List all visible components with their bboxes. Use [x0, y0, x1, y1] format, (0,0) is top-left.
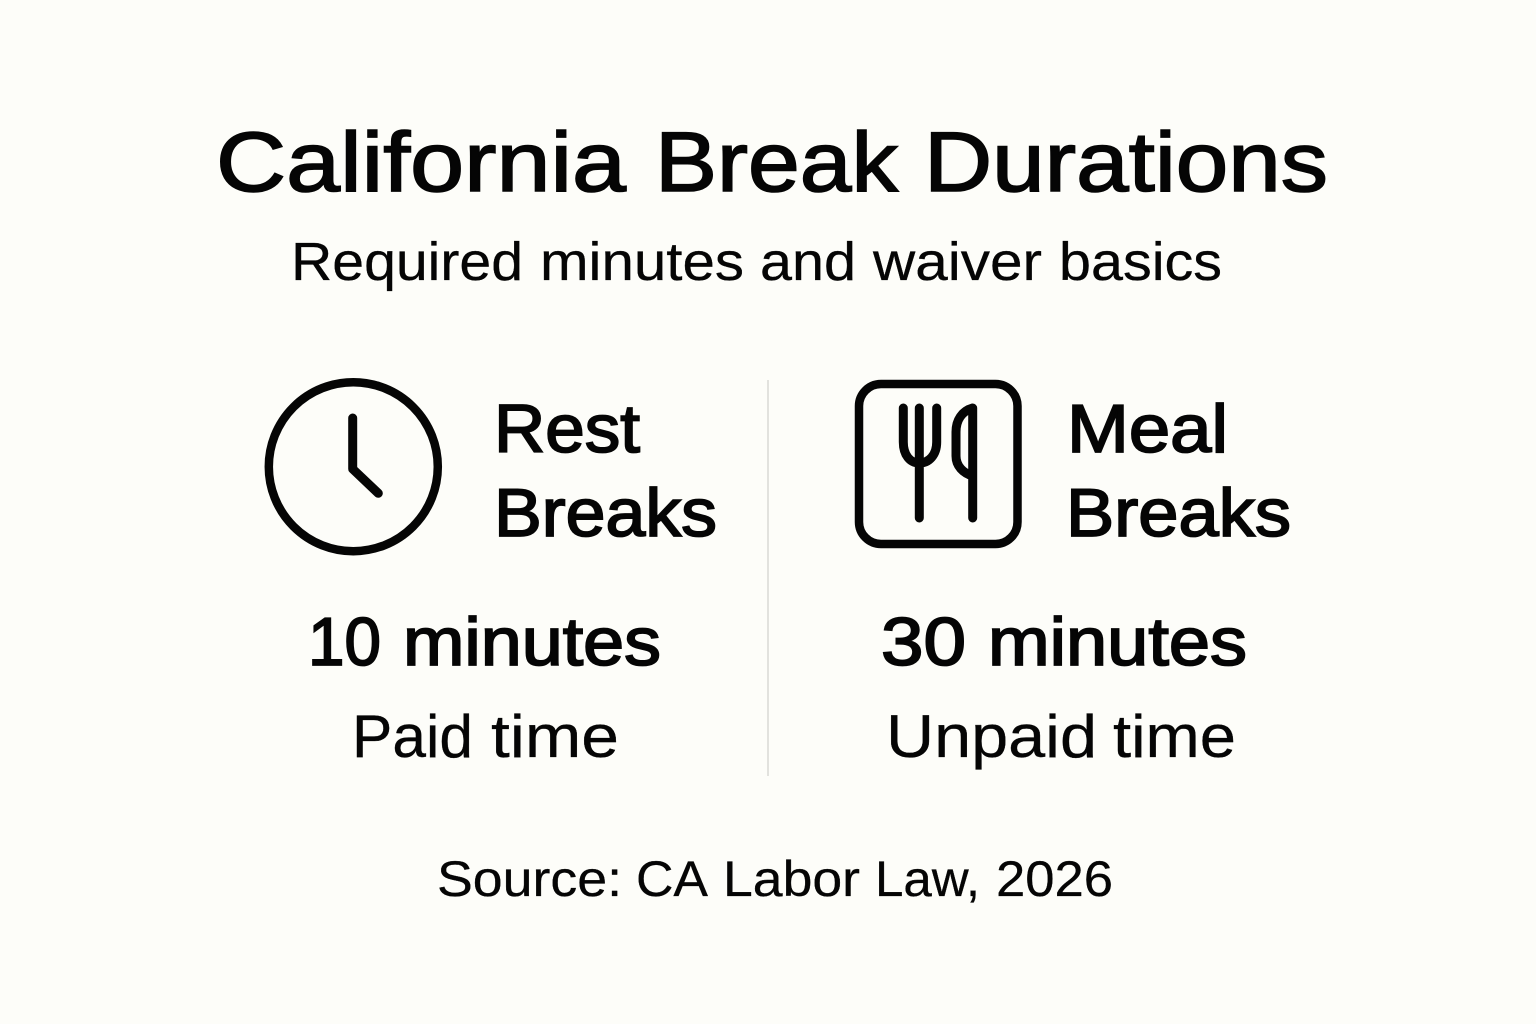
duration: 10 minutes: 10 [308, 604, 381, 680]
subtitle: minutes [540, 232, 744, 292]
note: unpaid time: Unpaid [886, 703, 1097, 770]
source note: Labor [723, 851, 860, 907]
note: unpaid time: time [1113, 703, 1236, 770]
subtitle: and [760, 232, 856, 292]
heading: rest breaks: Breaks [494, 475, 717, 551]
duration: 10 minutes [308, 604, 661, 680]
heading: meal breaks: Meal [1067, 391, 1228, 467]
heading: rest breaks [494, 391, 717, 551]
source note: Source: [437, 851, 622, 907]
source note [437, 851, 1113, 907]
panel: rest breaks [269, 382, 717, 770]
subtitle: waiver [872, 232, 1042, 292]
subtitle: basics [1059, 232, 1222, 292]
heading: meal breaks [1066, 391, 1291, 551]
duration: 30 minutes [881, 604, 1247, 680]
title [216, 115, 1328, 209]
heading: meal breaks: Breaks [1066, 475, 1291, 551]
source note: 2026 [996, 851, 1113, 907]
title: Durations [924, 115, 1328, 209]
duration: 30 minutes: minutes [988, 604, 1247, 680]
source note: Law, [875, 851, 980, 907]
title: Break [655, 115, 899, 209]
duration: 30 minutes: 30 [881, 604, 966, 680]
duration: 10 minutes: minutes [403, 604, 661, 680]
note: paid time [352, 703, 619, 770]
subtitle: Required [291, 232, 523, 292]
subtitle [291, 232, 1222, 292]
panel: meal breaks [859, 384, 1291, 770]
title: California [216, 115, 626, 209]
note: unpaid time [886, 703, 1236, 770]
icon: clock [269, 382, 438, 551]
icon: fork and knife [859, 384, 1018, 544]
heading: rest breaks: Rest [494, 391, 640, 467]
source note: CA [636, 851, 709, 907]
note: paid time: time [491, 703, 619, 770]
note: paid time: Paid [352, 703, 473, 770]
